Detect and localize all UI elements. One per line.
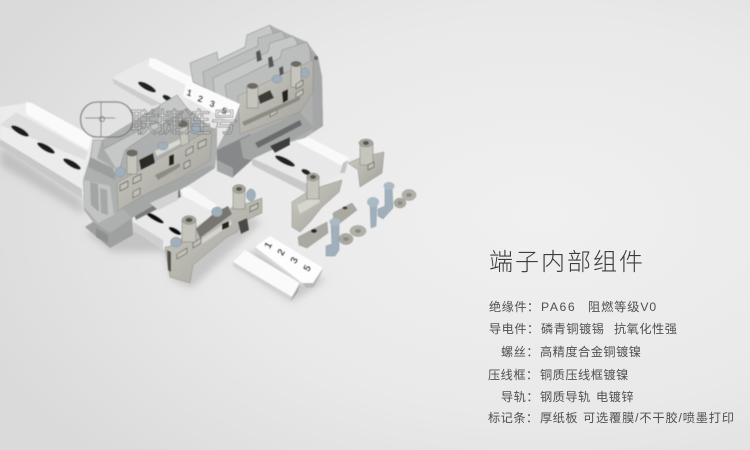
marker strip on rear terminal: 1 xyxy=(186,87,193,98)
rear fins xyxy=(190,25,311,110)
rail under front terminal xyxy=(133,187,217,250)
marker strip on rear terminal: 5 xyxy=(221,105,228,116)
spec: marker: 可选覆膜/不干胶/喷墨打印 xyxy=(583,410,735,425)
loose parts: nuts xyxy=(339,190,416,244)
spec: pressure frame: 铜质压线框镀镍 xyxy=(540,367,629,382)
marker strip on rear terminal: 2 xyxy=(197,93,204,104)
left rail xyxy=(0,102,95,198)
spec: screw: 螺丝： xyxy=(501,345,539,359)
front fins xyxy=(88,95,187,180)
spec: conductor: 抗氧化性强 xyxy=(614,321,677,336)
blank strip xyxy=(233,250,300,297)
spec: rail: 钢质导轨 xyxy=(540,390,591,404)
marker strip on rear terminal xyxy=(183,80,240,123)
loose parts: lower conductor xyxy=(292,173,342,232)
marker strips: 1 xyxy=(263,240,275,251)
spec: insulator: 绝缘件： xyxy=(489,300,540,314)
loose parts: upper conductor xyxy=(348,139,384,187)
rear terminal block xyxy=(190,25,323,178)
front terminal metal plate xyxy=(115,120,212,211)
soft ground shadows xyxy=(0,146,326,302)
marker strips: 3 xyxy=(289,255,301,266)
spec: insulator: PA66 xyxy=(541,300,576,314)
illustration: terminal block components xyxy=(0,25,416,302)
front terminal block xyxy=(83,95,217,248)
rear terminal metal plate xyxy=(238,60,313,134)
loose parts: screws xyxy=(326,182,394,256)
loose parts: clamp blocks xyxy=(298,203,357,248)
spec: conductor: 磷青铜镀锡 xyxy=(541,321,604,336)
right rail under rear terminal xyxy=(252,130,349,193)
watermark logo xyxy=(81,102,238,138)
spec: rail: 导轨： xyxy=(501,390,539,404)
spec: rail: 电镀锌 xyxy=(596,389,634,404)
spec: conductor: 导电件： xyxy=(489,322,540,336)
marker strips: 2 xyxy=(276,247,288,258)
spec list xyxy=(488,299,735,425)
spec: marker: 厚纸板 xyxy=(540,411,578,425)
front loose conductor xyxy=(165,184,262,283)
rear rail upper xyxy=(112,58,197,115)
spec: insulator: 阻燃等级V0 xyxy=(588,299,657,314)
spec: marker: 标记条： xyxy=(488,411,539,425)
spec: screw: 高精度合金铜镀镍 xyxy=(540,344,642,359)
title: 端子内部组件 xyxy=(489,249,645,276)
marker strip on rear terminal: 3 xyxy=(209,98,216,109)
marker strips xyxy=(233,236,323,301)
numbered strip xyxy=(255,236,323,283)
watermark logo: 联捷连号 xyxy=(130,108,238,138)
spec: pressure frame: 压线框： xyxy=(488,368,539,382)
marker strips: 5 xyxy=(302,263,314,274)
